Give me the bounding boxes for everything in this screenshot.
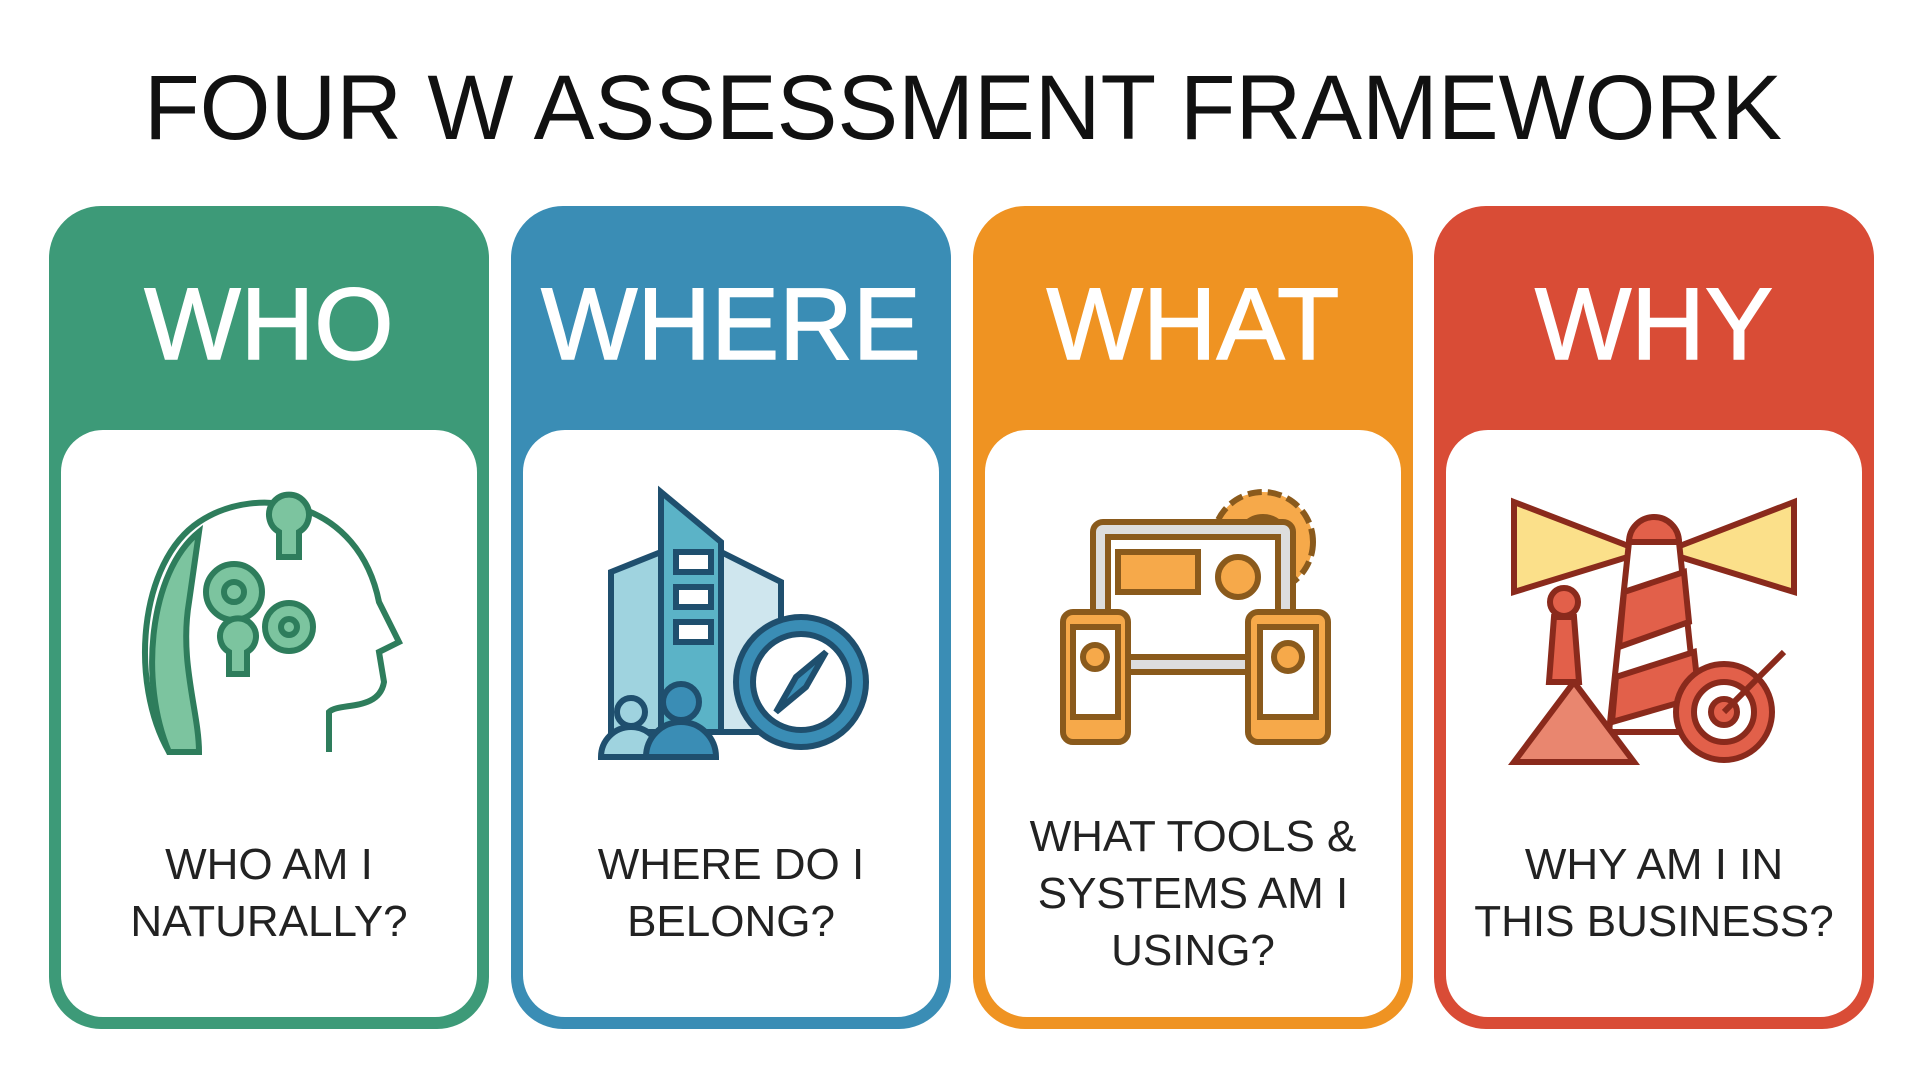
panel: why: [1434, 206, 1874, 1029]
question: who: [130, 840, 408, 946]
panel: who: [49, 206, 489, 1029]
question: what: USING?: [1111, 926, 1275, 975]
question: why: THIS BUSINESS?: [1474, 897, 1834, 946]
question: what: [1030, 812, 1356, 975]
heading: WHERE: WHERE: [541, 267, 921, 381]
question: why: [1474, 840, 1834, 946]
heading: WHAT: WHAT: [1047, 267, 1339, 381]
question: what: WHAT TOOLS &: [1030, 812, 1356, 861]
panel: what: [973, 206, 1413, 1029]
heading: WHY: WHY: [1535, 267, 1773, 381]
icon: lighthouse and target: [1508, 498, 1797, 765]
question: where: WHERE DO I: [598, 840, 864, 889]
panel: where: [511, 206, 951, 1029]
icon: head with gears: [142, 492, 403, 755]
question: who: WHO AM I: [165, 840, 373, 889]
icon: building and compass: [598, 486, 869, 760]
white panel what: [985, 430, 1401, 1017]
question: where: [598, 840, 864, 946]
icon: devices and gear: [1060, 489, 1331, 745]
question: who: NATURALLY?: [130, 897, 408, 946]
white panel who: [61, 430, 477, 1017]
question: where: BELONG?: [627, 897, 835, 946]
question: what: SYSTEMS AM I: [1038, 869, 1348, 918]
heading: WHO: WHO: [144, 267, 394, 381]
white panel where: [523, 430, 939, 1017]
title: FOUR W ASSESSMENT FRAMEWORK: [144, 57, 1782, 159]
question: why: WHY AM I IN: [1525, 840, 1783, 889]
white panel why: [1446, 430, 1862, 1017]
